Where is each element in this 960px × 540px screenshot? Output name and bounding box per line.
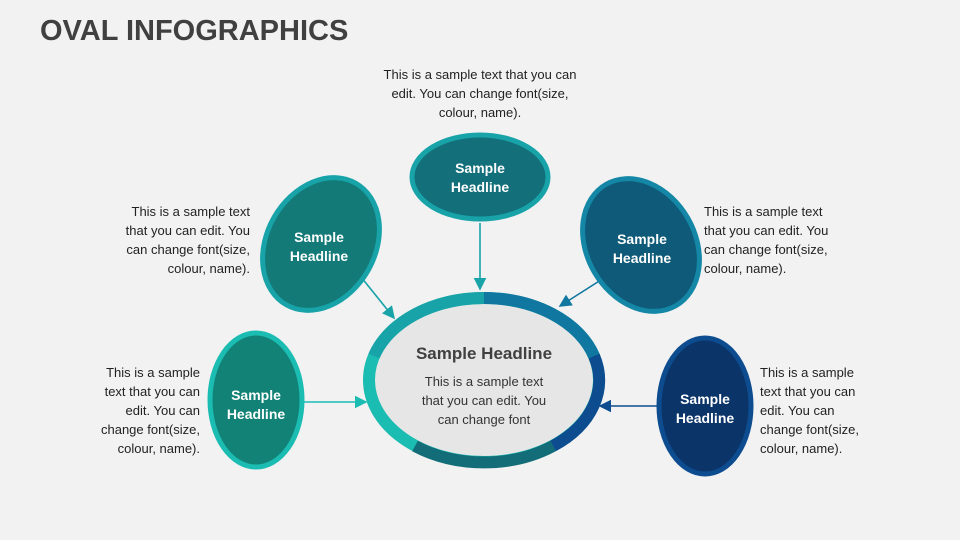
oval: bottom-right	[659, 338, 751, 474]
text: bottom-right: edit. You can	[760, 403, 834, 418]
text: bottom-right: This is a sample	[760, 365, 854, 380]
text: right	[704, 204, 828, 276]
text: bottom-left: change font(size,	[101, 422, 200, 437]
oval: bottom-right: Sample	[680, 391, 730, 407]
arrow: top	[479, 223, 481, 289]
oval: right: Headline	[613, 250, 671, 266]
text: bottom-right: text that you can	[760, 384, 855, 399]
text: top: This is a sample text that you can	[384, 67, 576, 82]
arrow: bottom-right	[600, 405, 660, 407]
arrow: right	[560, 278, 604, 306]
text: bottom-left: This is a sample	[106, 365, 200, 380]
central oval: can change font	[438, 412, 531, 427]
text: left: This is a sample text	[132, 204, 250, 219]
text: right: that you can edit. You	[704, 223, 828, 238]
oval: top: Headline	[451, 179, 509, 195]
text: bottom-right: colour, name).	[760, 441, 842, 456]
oval: left: Headline	[290, 248, 348, 264]
central oval: This is a sample text	[425, 374, 544, 389]
central oval: Sample Headline	[416, 344, 552, 363]
title: OVAL INFOGRAPHICS	[40, 15, 348, 47]
arrow: left	[357, 272, 394, 318]
central oval	[369, 298, 599, 462]
text: right: can change font(size,	[704, 242, 828, 257]
oval: left	[239, 156, 403, 332]
text: left: that you can edit. You	[126, 223, 250, 238]
text: bottom-left: text that you can	[105, 384, 200, 399]
oval: bottom-left: Headline	[227, 406, 285, 422]
text: bottom-left	[101, 365, 200, 456]
oval: left: Sample	[294, 229, 344, 245]
oval: bottom-right: Headline	[676, 410, 734, 426]
text: left: colour, name).	[168, 261, 250, 276]
text: top: colour, name).	[439, 105, 521, 120]
text: bottom-left: edit. You can	[126, 403, 200, 418]
central oval: that you can edit. You	[422, 393, 546, 408]
oval: top	[412, 135, 548, 219]
text: right: This is a sample text	[704, 204, 822, 219]
oval: top: Sample	[455, 160, 505, 176]
text: bottom-right	[760, 365, 859, 456]
text: bottom-left: colour, name).	[118, 441, 200, 456]
text: top: edit. You can change font(size,	[391, 86, 569, 101]
text: left: can change font(size,	[126, 242, 250, 257]
arrow: bottom-left	[303, 401, 366, 403]
text: left	[126, 204, 250, 276]
oval: right: Sample	[617, 231, 667, 247]
oval: bottom-left	[210, 333, 302, 467]
text: bottom-right: change font(size,	[760, 422, 859, 437]
oval: bottom-left: Sample	[231, 387, 281, 403]
text: top	[384, 67, 576, 120]
text: right: colour, name).	[704, 261, 786, 276]
oval: right	[559, 157, 723, 333]
